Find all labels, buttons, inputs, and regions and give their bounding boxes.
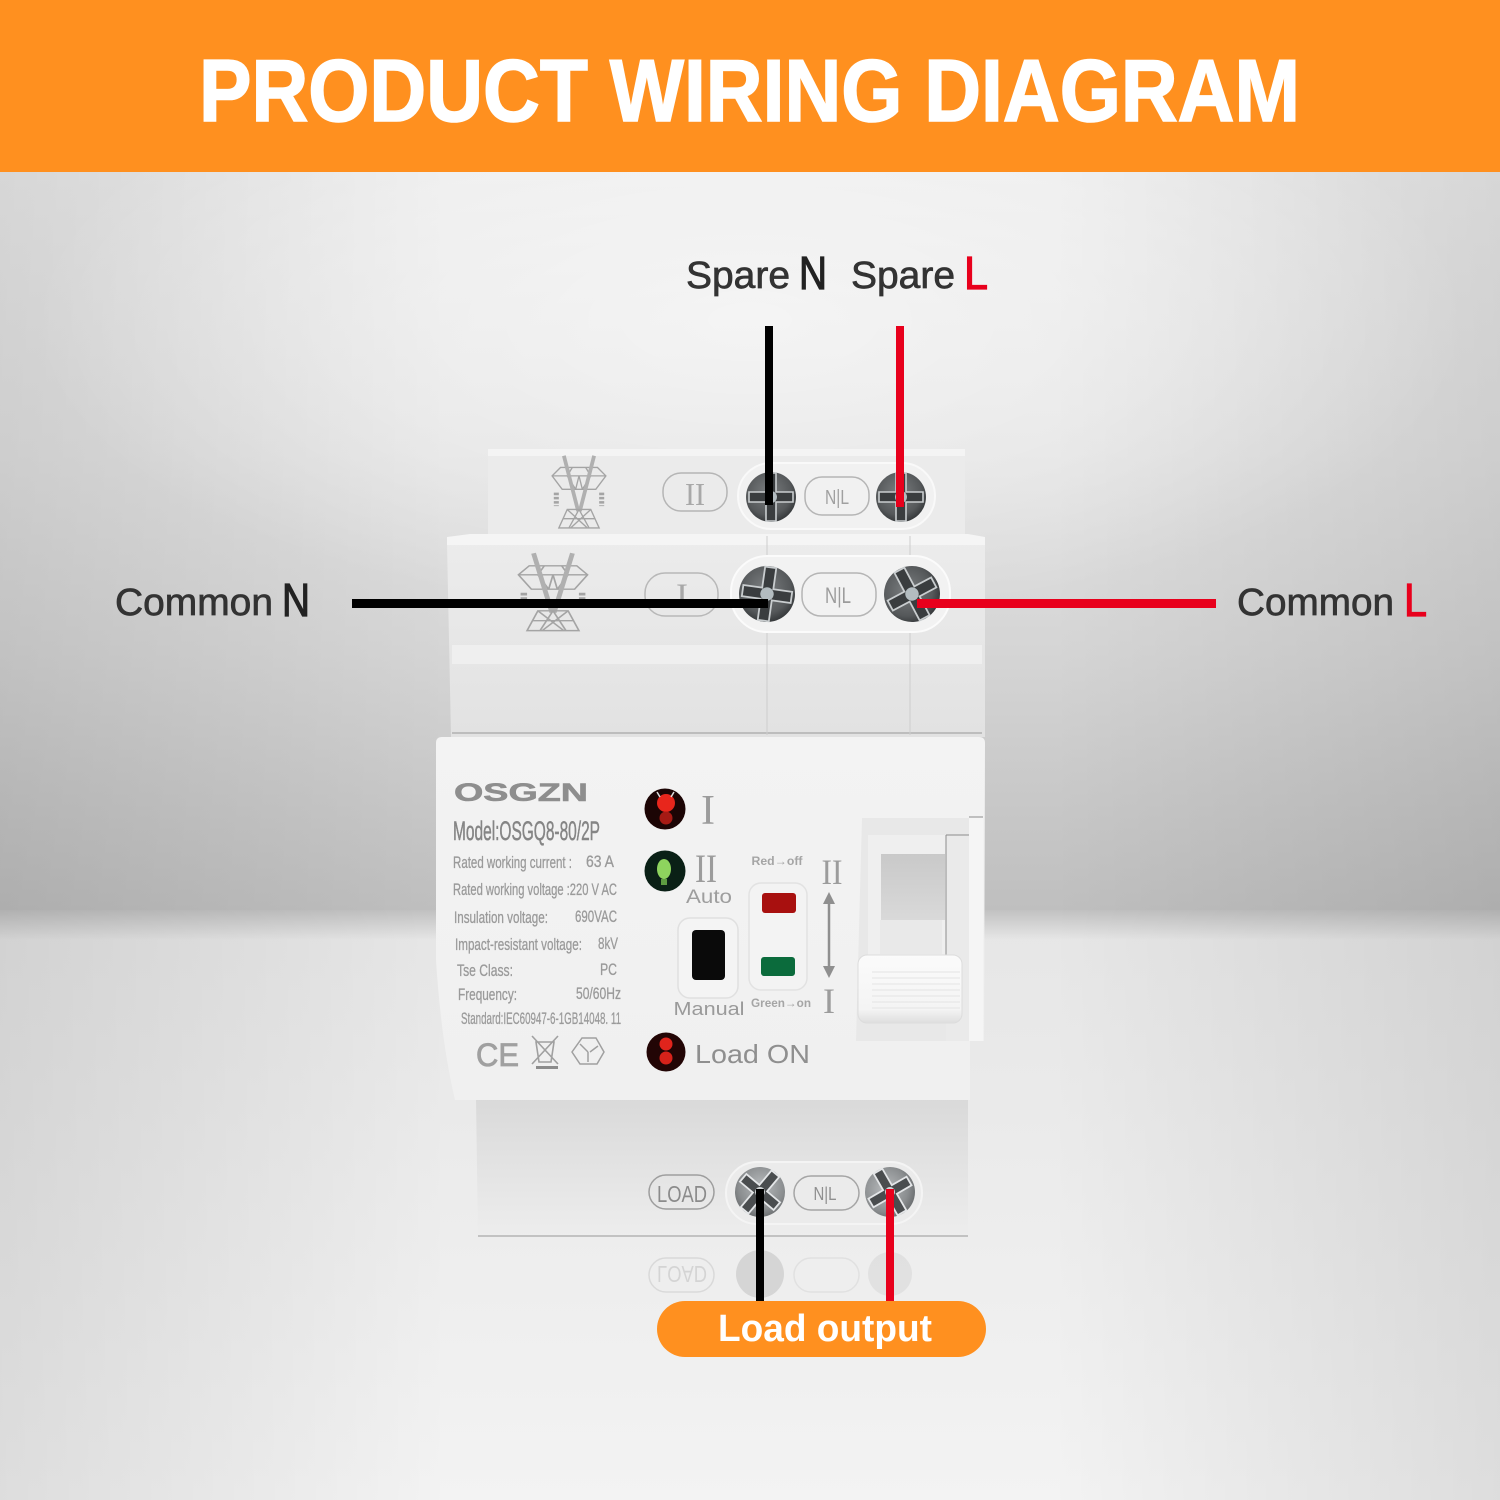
background: studio wall xyxy=(0,172,1500,910)
reflection of load terminal xyxy=(649,1250,912,1298)
wire: spare N xyxy=(765,326,773,505)
position scale: II xyxy=(822,852,842,892)
background: horizon blend xyxy=(0,908,1500,940)
label: spare L xyxy=(851,247,988,299)
position scale: I xyxy=(823,981,835,1021)
spec list: PC xyxy=(600,960,617,979)
label: II pill: II xyxy=(685,476,705,512)
screw: spare L xyxy=(876,472,926,522)
compliance marks: CE xyxy=(476,1037,519,1073)
label: LOAD pill xyxy=(649,1175,714,1209)
label: spare L: Spare xyxy=(851,255,955,297)
module: common input terminal block xyxy=(447,534,985,737)
label: spare N: N xyxy=(799,247,827,299)
label: N|L pill: N|L xyxy=(825,487,849,509)
module: spare input terminal block xyxy=(488,449,965,540)
roman numeral II: II xyxy=(695,846,717,891)
label: common N: N xyxy=(282,574,310,626)
icon: pylon II xyxy=(552,456,606,528)
spec list: Frequency: xyxy=(458,985,517,1004)
manual label: Manual xyxy=(674,999,744,1019)
device: transfer switch xyxy=(436,449,985,1298)
label: spare L: L xyxy=(964,247,988,299)
status window xyxy=(749,883,807,990)
icon: pylon I xyxy=(518,553,588,631)
screw: spare N xyxy=(746,472,796,522)
brand logo: OSGZN xyxy=(454,779,588,807)
spec list: Rated working current : xyxy=(453,853,572,872)
indicator II: green led xyxy=(644,850,686,892)
label: N|L pill xyxy=(794,1176,859,1210)
spec list: 50/60Hz xyxy=(576,984,621,1003)
spec list xyxy=(453,852,621,1028)
label: N|L pill xyxy=(805,477,869,515)
wire: load L xyxy=(886,1189,894,1302)
spec list: Rated working voltage :220 V AC xyxy=(453,880,617,899)
front control panel xyxy=(436,737,985,1100)
indicator I: red led xyxy=(644,788,686,830)
wire: load N xyxy=(756,1189,764,1302)
background: studio floor xyxy=(0,910,1500,1500)
label: I pill xyxy=(645,573,718,616)
green on label: Green→on xyxy=(751,996,811,1010)
label: common N: Common xyxy=(115,582,273,624)
auto label: Auto xyxy=(686,887,732,908)
screw: common N xyxy=(735,562,799,626)
wire: common L xyxy=(917,599,1216,608)
reflection of load terminal: LOAD xyxy=(657,1261,707,1287)
label: common L xyxy=(1237,574,1427,626)
module: load terminal block xyxy=(476,1098,968,1236)
label: common L: Common xyxy=(1237,582,1394,624)
red off label: Red→off xyxy=(752,854,804,868)
spec list: Tse Class: xyxy=(457,961,513,980)
label: common N xyxy=(115,574,310,626)
screw plate xyxy=(726,1162,922,1224)
title: PRODUCT WIRING DIAGRAM xyxy=(199,41,1300,140)
screw: load N xyxy=(725,1157,795,1227)
callout: load output xyxy=(657,1301,986,1357)
load on label: Load ON xyxy=(695,1039,810,1069)
label: II pill xyxy=(663,473,727,512)
label: N|L pill: N|L xyxy=(814,1184,836,1204)
compliance marks xyxy=(476,1036,604,1073)
position scale xyxy=(822,852,842,1021)
screw plate xyxy=(731,556,950,632)
spec list: 690VAC xyxy=(575,907,617,926)
spec list: 8kV xyxy=(598,934,618,953)
label: N|L pill: N|L xyxy=(825,583,851,608)
wire: spare L xyxy=(896,326,904,507)
roman numeral I: I xyxy=(701,788,715,834)
mode switch xyxy=(678,918,738,998)
screw plate xyxy=(738,463,935,529)
screw: common L xyxy=(874,556,950,632)
label: LOAD pill: LOAD xyxy=(657,1181,707,1207)
screw: load L xyxy=(856,1158,924,1226)
wire: common N xyxy=(352,599,768,608)
label: N|L pill xyxy=(802,573,876,616)
breaker toggle xyxy=(856,817,983,1041)
label: spare N xyxy=(686,247,827,299)
header banner xyxy=(0,0,1500,172)
label: spare N: Spare xyxy=(686,255,790,297)
load on led xyxy=(646,1032,686,1072)
background: upper light glow xyxy=(30,20,1470,620)
label: I pill: I xyxy=(676,576,688,616)
model line: Model:OSGQ8-80/2P xyxy=(453,816,600,846)
spec list: Impact-resistant voltage: xyxy=(455,935,582,954)
label: common L: L xyxy=(1404,574,1427,626)
spec list: 63 A xyxy=(586,852,615,871)
callout: load output: Load output xyxy=(718,1308,932,1350)
spec list: Insulation voltage: xyxy=(454,908,548,927)
spec list: Standard:IEC60947-6-1GB14048. 11 xyxy=(461,1009,621,1028)
